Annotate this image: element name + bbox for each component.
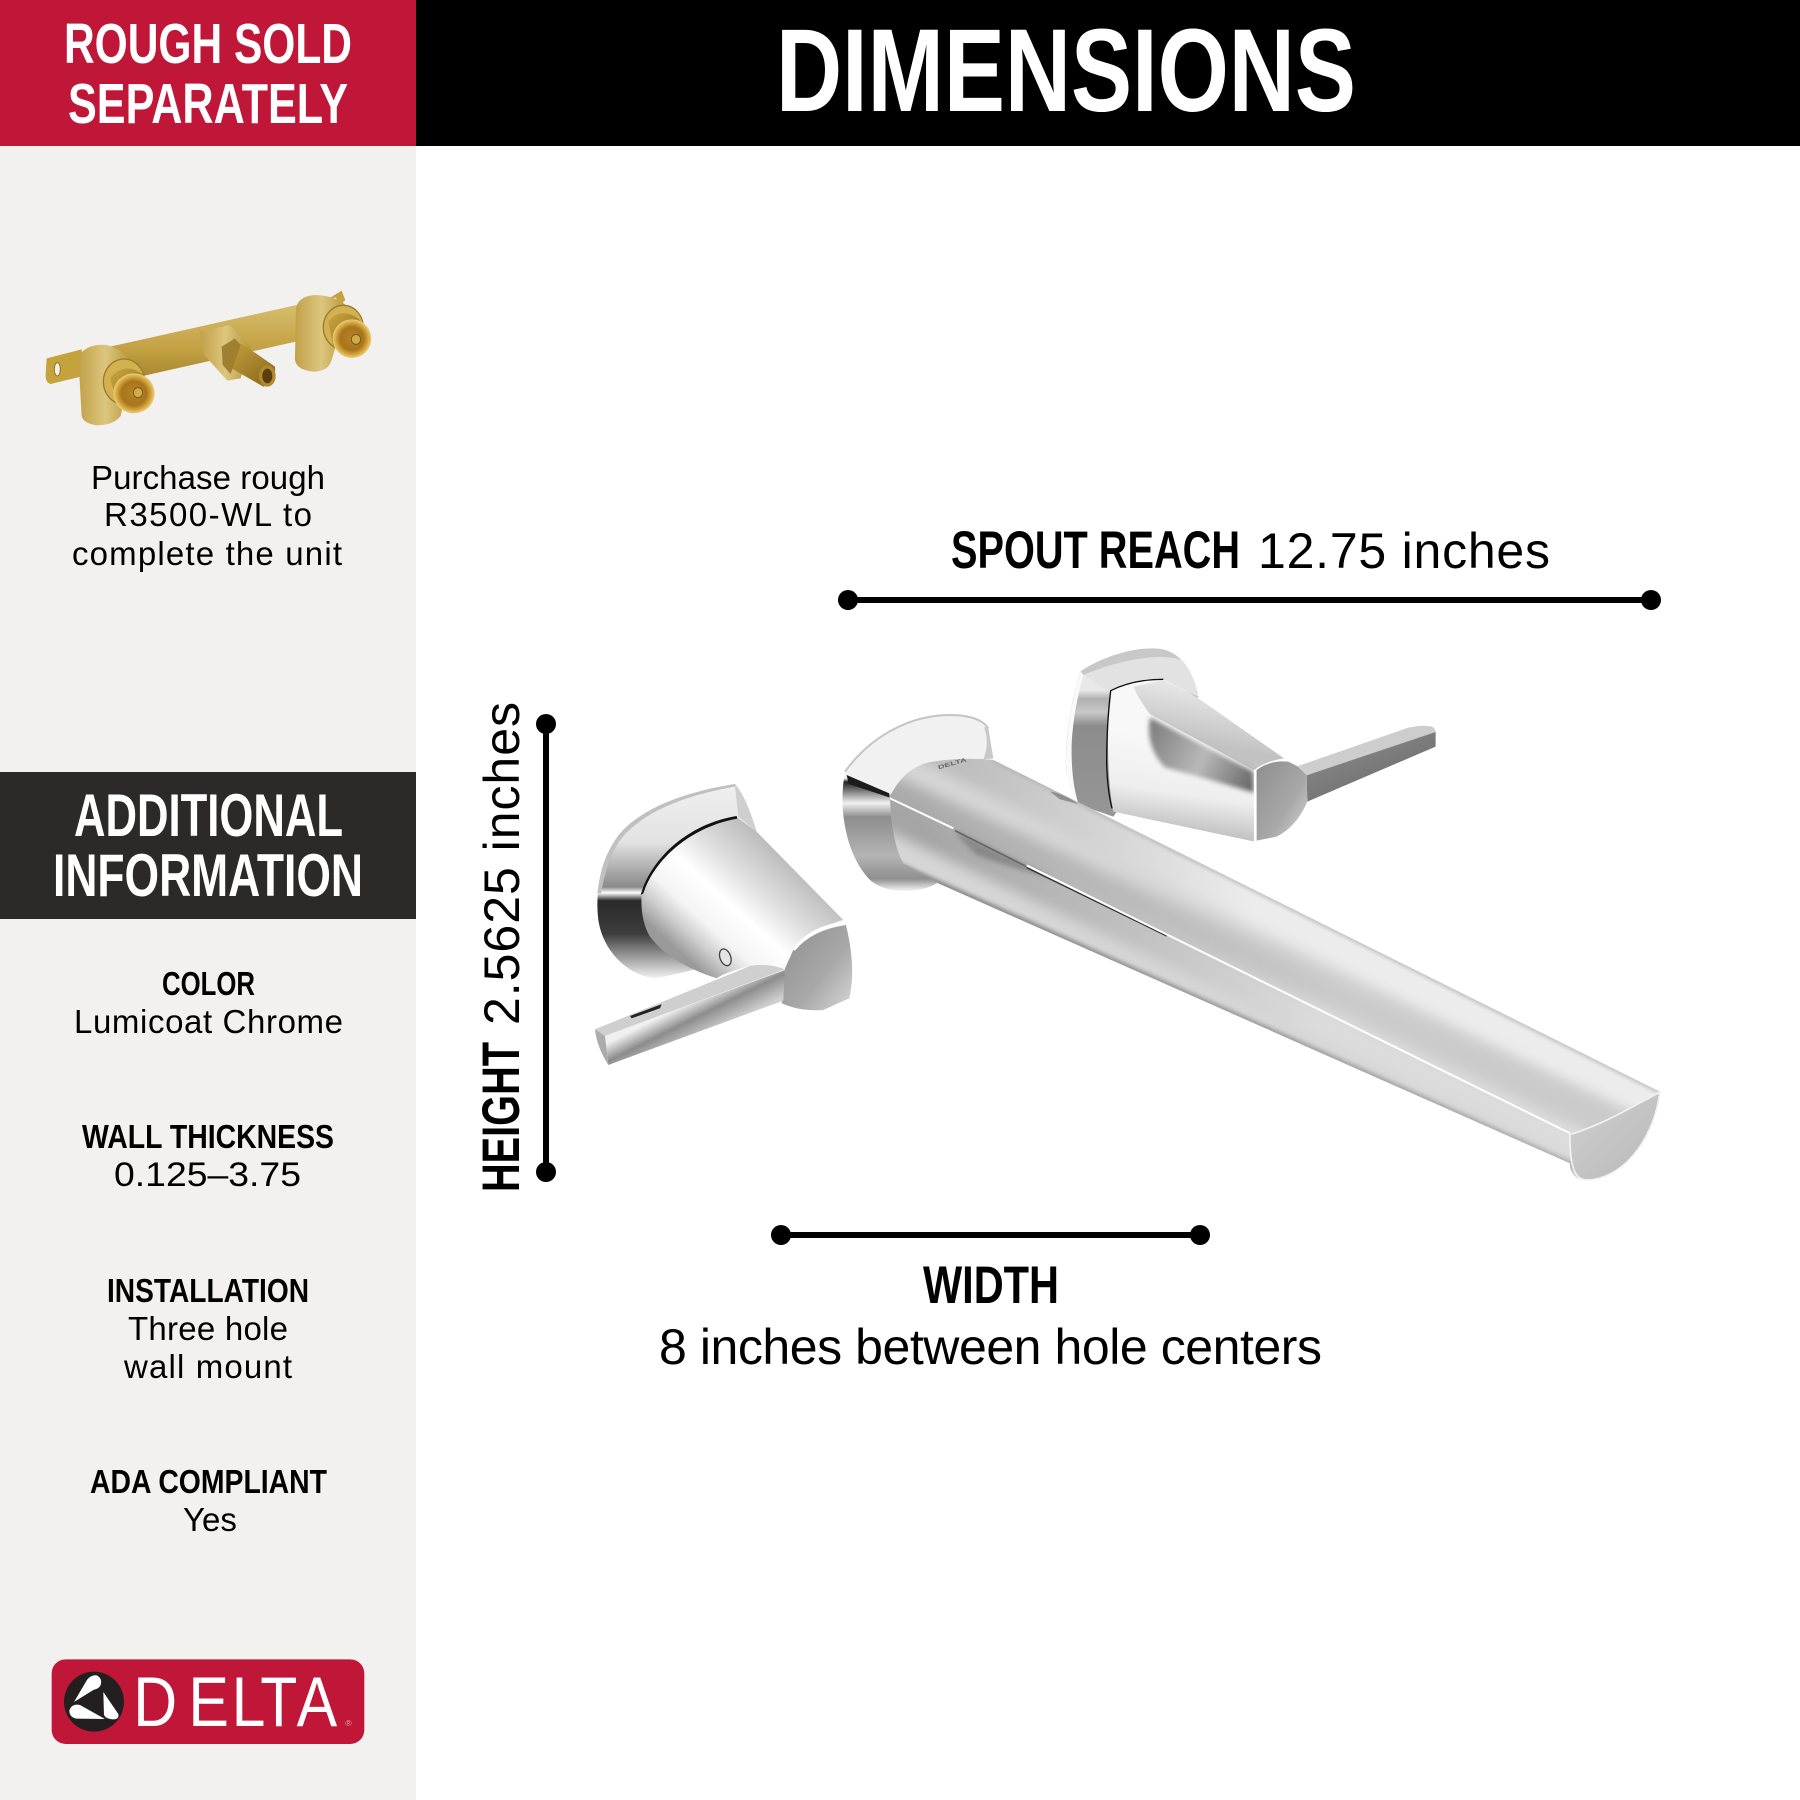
heading: rough sold separately: ROUGH SOLD xyxy=(64,12,352,76)
spout: main wall-mounted spout xyxy=(820,700,1753,1217)
dimension: spout reach xyxy=(838,521,1661,610)
spec: color xyxy=(74,965,343,1040)
spec: ada compliant: ADA COMPLIANT xyxy=(90,1463,327,1500)
panel: dimensions title bar xyxy=(416,0,1800,146)
heading: additional information: INFORMATION xyxy=(53,842,363,909)
heading: additional information xyxy=(53,782,363,909)
illustration: chrome faucet xyxy=(595,648,1661,1180)
panel: additional information heading bar xyxy=(0,772,416,919)
text block: purchase rough note xyxy=(72,459,342,572)
label: width: 8 inches between hole centers xyxy=(659,1319,1322,1375)
spec: installation: INSTALLATION xyxy=(107,1272,309,1309)
heading: rough sold separately xyxy=(64,12,352,136)
spec: ada compliant: Yes xyxy=(183,1501,237,1538)
label: width xyxy=(659,1256,1322,1375)
logo: delta xyxy=(52,1659,364,1744)
label: spout reach xyxy=(951,521,1550,580)
handle: back right xyxy=(1066,648,1436,842)
arrow: height line xyxy=(536,714,556,1182)
text block: purchase rough note: complete the unit xyxy=(72,535,342,572)
panel: left sidebar xyxy=(0,146,416,1800)
text block: purchase rough note: Purchase rough xyxy=(91,459,325,496)
spec: wall thickness: WALL THICKNESS xyxy=(82,1118,334,1155)
spec: wall thickness xyxy=(82,1118,334,1194)
logo: delta: DELTA xyxy=(133,1662,337,1741)
label: spout reach: 12.75 inches xyxy=(1258,523,1550,579)
spec: color: Lumicoat Chrome xyxy=(74,1003,343,1040)
text block: purchase rough note: R3500-WL to xyxy=(104,496,312,533)
spec: installation: Three hole xyxy=(128,1310,288,1347)
heading: additional information: ADDITIONAL xyxy=(74,782,343,849)
panel: rough sold separately banner xyxy=(0,0,416,146)
handle: front left xyxy=(595,784,852,1065)
spec: installation: wall mount xyxy=(123,1348,292,1385)
title: DIMENSIONS xyxy=(776,5,1356,137)
label: spout reach: SPOUT REACH xyxy=(951,521,1240,580)
logo: delta: ® xyxy=(345,1718,352,1728)
arrow: spout reach line xyxy=(838,590,1661,610)
label: height: HEIGHT xyxy=(472,1042,531,1192)
brand mark on spout: DELTA xyxy=(938,757,967,771)
label: height: 2.5625 inches xyxy=(474,702,530,1025)
dimension: height xyxy=(472,702,556,1192)
dimension: width xyxy=(659,1225,1322,1375)
spec: color: COLOR xyxy=(162,965,255,1002)
spec: wall thickness: 0.125–3.75 xyxy=(114,1156,301,1194)
heading: rough sold separately: SEPARATELY xyxy=(68,72,348,136)
label: height xyxy=(472,702,531,1192)
spec: installation xyxy=(107,1272,309,1385)
arrow: width line xyxy=(771,1225,1210,1245)
icon: brass rough-in valve xyxy=(46,291,371,425)
spec: ada compliant xyxy=(90,1463,327,1538)
label: width: WIDTH xyxy=(923,1256,1059,1315)
